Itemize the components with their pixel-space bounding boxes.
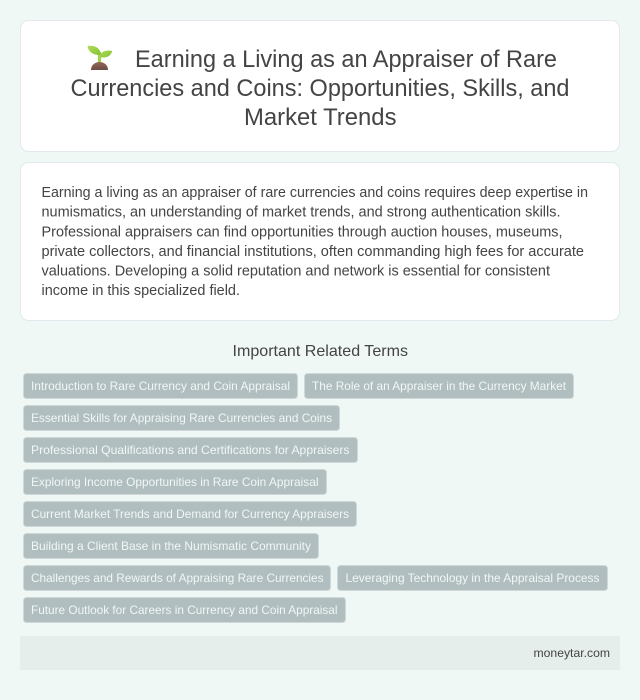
tag: future outlook: Future Outlook for Careers in Currency and Coin Appraisal (31, 603, 338, 617)
tag: leveraging technology: Leveraging Technology in the Appraisal Process (346, 571, 600, 585)
title: Earning a Living as an Appraiser of Rare (135, 46, 557, 73)
tag: role of an appraiser (304, 374, 574, 398)
heading: related terms: Important Related Terms (232, 343, 408, 360)
title (70, 46, 570, 131)
tag: future outlook (24, 598, 346, 622)
title: Currencies and Coins: Opportunities, Skills, and (70, 75, 570, 102)
tag: introduction: Introduction to Rare Currency and Coin Appraisal (31, 379, 290, 393)
text block: summary: income in this specialized field. (42, 283, 240, 299)
tag: introduction (24, 374, 298, 398)
tag: qualifications: Professional Qualifications and Certifications for Appraisers (31, 443, 350, 457)
tag list: related terms (24, 374, 608, 622)
tag: leveraging technology (338, 566, 608, 590)
tag: challenges and rewards: Challenges and Rewards of Appraising Rare Currencies (31, 571, 324, 585)
tag: qualifications (24, 438, 358, 462)
text block: summary: private collectors, and financial institutions, often commanding high fees for accurate (42, 244, 584, 260)
tag: market trends (24, 502, 356, 526)
panel: title card (20, 20, 620, 152)
title: Market Trends (244, 104, 396, 131)
tag: essential skills: Essential Skills for Appraising Rare Currencies and Coins (31, 411, 332, 425)
text block: summary: valuations. Developing a solid reputation and network is essential for consistent (42, 264, 550, 280)
text block: summary (42, 185, 588, 299)
icon: seedling (88, 46, 112, 70)
tag: essential skills (24, 406, 340, 430)
text block: summary: Professional appraisers can find opportunities through auction houses, museums, (42, 224, 562, 240)
tag: client base (24, 534, 318, 558)
text block: summary: Earning a living as an appraiser of rare currencies and coins requires deep expertise in (42, 185, 588, 201)
footer: moneytar.com (534, 646, 610, 660)
panel: summary card (20, 162, 620, 320)
tag: role of an appraiser: The Role of an Appraiser in the Currency Market (312, 379, 567, 393)
tag: market trends: Current Market Trends and Demand for Currency Appraisers (31, 507, 349, 521)
tag: income opportunities: Exploring Income Opportunities in Rare Coin Appraisal (31, 475, 318, 489)
tag: challenges and rewards (24, 566, 330, 590)
tag: income opportunities (24, 470, 326, 494)
text block: summary: numismatics, an understanding of market trends, and strong authentication skills. (42, 204, 560, 220)
footer (20, 636, 620, 670)
tag: client base: Building a Client Base in the Numismatic Community (31, 539, 311, 553)
